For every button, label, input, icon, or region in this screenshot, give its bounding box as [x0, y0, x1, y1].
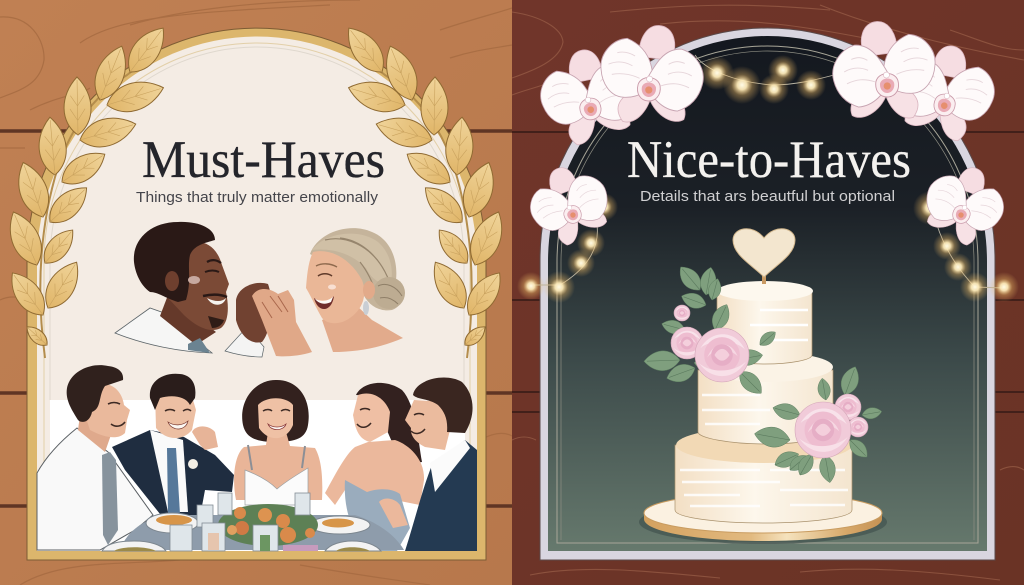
bottom tier: [675, 427, 852, 523]
woman: neck and shoulders: [322, 305, 403, 352]
bride: dress: [245, 468, 308, 505]
man: hair: [134, 222, 215, 302]
glasses: [170, 493, 310, 551]
bride: features: [263, 410, 290, 430]
illustration: laurel wreath right branch: [339, 20, 511, 358]
friend 2: features: [165, 410, 191, 411]
icon: orchid right: [914, 154, 1015, 254]
friend 1: hair: [67, 365, 123, 422]
friend 2: face: [155, 390, 196, 438]
friend 2: jacket: [112, 430, 234, 517]
bride: straps: [248, 445, 305, 470]
decoration: fairy lights: [517, 55, 1019, 303]
illustration: friends at the dinner table: [37, 365, 477, 551]
friend 4: face: [353, 394, 390, 442]
cake board: [639, 493, 887, 544]
icon: orchid cluster top left: [531, 22, 707, 151]
table centerpiece: [218, 504, 318, 551]
panel: wooden background, right: [512, 0, 1024, 585]
woman: hair strands and bun: [312, 234, 405, 315]
friend 5: jacket: [405, 440, 477, 551]
icon: orchid left: [519, 154, 620, 254]
friend 1: face: [84, 384, 130, 437]
upper roses: [671, 305, 749, 382]
friend 2: shirt: [150, 430, 188, 512]
friend 4: hand: [379, 498, 408, 528]
friend 5: features: [411, 414, 425, 433]
subheading: nice-to-haves description: Details that ars beautful but optional: [640, 189, 895, 205]
friend 2: raised hand: [192, 426, 218, 450]
friend 4: arm and chest: [325, 440, 424, 505]
lower greenery: [753, 364, 883, 484]
heading: Nice-to-Haves: Nice-to-Haves: [627, 131, 911, 189]
man: shirt: [115, 308, 212, 353]
friend 4: features: [357, 408, 371, 427]
friend 2: tie: [167, 448, 180, 514]
friend 5: hair: [413, 378, 473, 433]
friend 1: neck: [78, 415, 112, 452]
middle tier: [698, 352, 833, 444]
man: neck: [160, 295, 216, 345]
friend 2: boutonniere: [188, 459, 198, 469]
panel: must-haves arch frame: [27, 28, 486, 560]
panel: nice-to-haves arch frame: [540, 28, 995, 560]
illustration: three-tier wedding cake: [639, 229, 887, 544]
man: face: [168, 242, 229, 330]
icon: orchid cluster top right: [829, 18, 1004, 147]
woman: hair back: [310, 228, 402, 310]
lower roses: [795, 394, 868, 458]
heart topper: [733, 229, 795, 284]
woman: facial features: [314, 264, 337, 309]
bride: skin: [234, 432, 322, 500]
friend 1: shirt: [37, 428, 153, 550]
illustration: laurel wreath left branch: [1, 20, 173, 358]
friend 1: tie: [102, 452, 118, 545]
panel: wooden background, left: [0, 0, 512, 585]
top tier: [717, 281, 813, 364]
table: [120, 515, 404, 550]
friend 4: dress: [345, 480, 410, 551]
hands: clasped: [236, 283, 312, 356]
friend 5: shirt: [430, 440, 470, 492]
bride: face: [258, 398, 293, 438]
man: facial features: [165, 260, 227, 328]
man: right sleeve: [225, 327, 264, 357]
heading: Must-Haves: Must-Haves: [142, 131, 385, 189]
upper greenery: [644, 262, 779, 399]
plates and food: [102, 513, 381, 551]
friend 4: hair: [350, 383, 422, 474]
subheading: must-haves description: Things that truly matter emotionally: [136, 189, 379, 206]
friend 1: features: [108, 402, 125, 426]
man: tie: [188, 338, 210, 353]
bride: hair: [242, 380, 309, 442]
woman: face: [306, 251, 364, 323]
friend 5: face: [405, 400, 450, 450]
friend 2: hair: [150, 374, 195, 410]
illustration: couple holding hands: [115, 222, 405, 357]
